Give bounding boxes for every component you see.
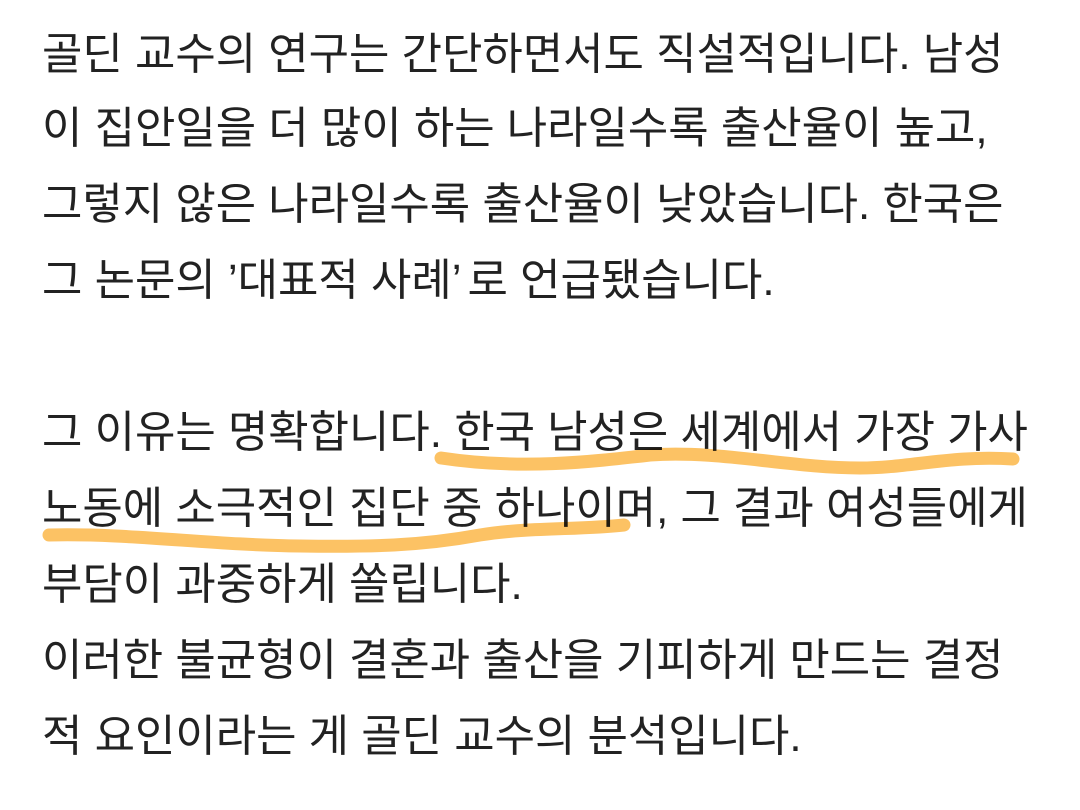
paragraph 2: 노동에 소극적인 집단 중 하나이며, 그 결과 여성들에게 <box>42 484 1028 533</box>
paragraph 1: 골딘 교수의 연구는 간단하면서도 직설적입니다. 남성 <box>42 30 1004 79</box>
paragraph 1: 이 집안일을 더 많이 하는 나라일수록 출산율이 높고, <box>42 104 988 153</box>
paragraph 2 <box>42 408 1028 761</box>
paragraph 1 <box>42 30 1004 305</box>
paragraph 2: 그 이유는 명확합니다. 한국 남성은 세계에서 가장 가사 <box>42 408 1028 457</box>
paragraph 2: 적 요인이라는 게 골딘 교수의 분석입니다. <box>42 712 802 761</box>
paragraph 1: 그 논문의 ’대표적 사례’로 언급됐습니다. <box>42 256 775 305</box>
paragraph 2: 이러한 불균형이 결혼과 출산을 기피하게 만드는 결정 <box>42 636 1004 685</box>
paragraph 2: 부담이 과중하게 쏠립니다. <box>42 560 523 609</box>
paragraph 1: 그렇지 않은 나라일수록 출산율이 낮았습니다. 한국은 <box>42 180 1004 229</box>
